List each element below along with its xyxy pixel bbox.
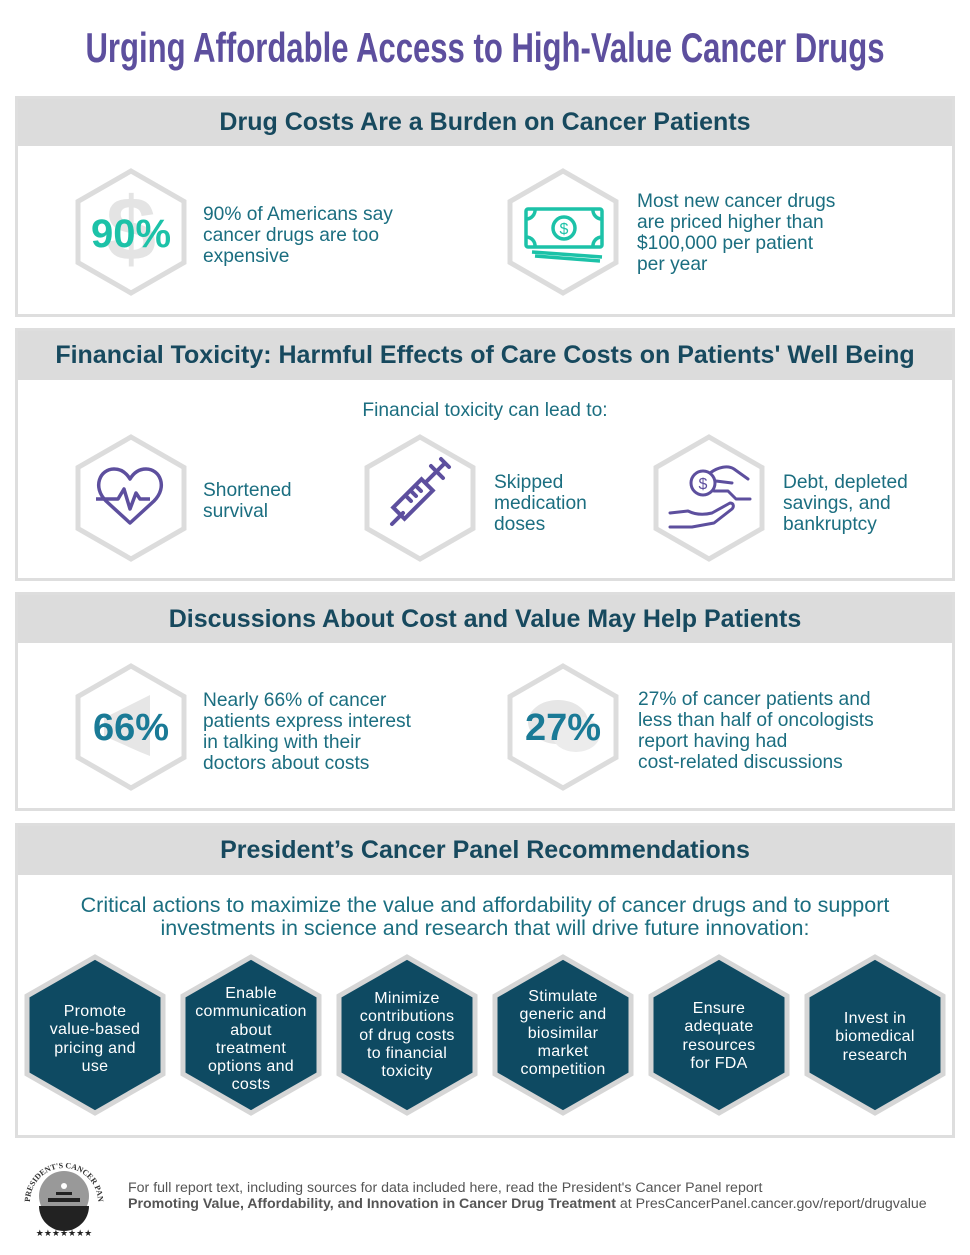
text: nearly 66%: Nearly 66% of cancer (203, 690, 386, 711)
text: shortened survival: survival (203, 501, 268, 522)
text: new cancer drugs: are priced higher than (637, 212, 824, 233)
rec 1: pricing and (54, 1040, 136, 1057)
text: 27%: cost-related discussions (638, 752, 843, 773)
panel: recommendations (15, 823, 955, 1138)
icon: 90% hexagon: 90% (91, 212, 171, 256)
text: shortened survival (203, 480, 292, 522)
heading: recommendations (18, 826, 952, 875)
rec 2: options and (208, 1058, 294, 1075)
rec 2: about (230, 1022, 272, 1039)
rec 3: contributions (360, 1008, 454, 1025)
rec 5: adequate (684, 1018, 754, 1035)
icon: 66% hexagon (76, 663, 186, 791)
rec 5 (683, 1000, 755, 1072)
text: shortened survival: Shortened (203, 480, 292, 501)
rec 4: generic and (520, 1006, 606, 1023)
rec 1: use (82, 1058, 108, 1075)
text: nearly 66% (203, 690, 411, 774)
panel: discussions (15, 592, 955, 811)
text: 27%: report having had (638, 731, 787, 752)
rec 5: resources (683, 1037, 755, 1054)
rec 3: toxicity (381, 1063, 433, 1080)
subtitle (81, 893, 890, 940)
heading: drug costs (18, 99, 952, 146)
rec 1 (50, 1003, 140, 1075)
icon: 90% hexagon: $ (106, 180, 156, 280)
footer text: Promoting Value, Affordability, and Innovation in Cancer Drug Treatment at PresCancerPanel.cancer.gov/report/drugvalue (128, 1196, 927, 1212)
text: new cancer drugs: $100,000 per patient (637, 233, 813, 254)
rec 5: for FDA (690, 1055, 748, 1072)
text: nearly 66%: in talking with their (203, 732, 361, 753)
icon: 27% hexagon (508, 663, 618, 791)
rec 6 (835, 1010, 915, 1064)
panel: drug costs (15, 96, 955, 317)
logo (24, 1162, 104, 1238)
heading: financial toxicity (18, 331, 952, 380)
heading: recommendations: President’s Cancer Panel Recommendations (220, 836, 750, 864)
rec 5: Ensure (693, 1000, 745, 1017)
rec 1: value-based (50, 1021, 140, 1038)
hexagons: recommendations (24, 954, 946, 1116)
icon: 66% hexagon: 66% (93, 707, 169, 749)
text: skipped doses: Skipped (494, 472, 563, 493)
rec 3: Minimize (374, 990, 440, 1007)
text: nearly 66%: doctors about costs (203, 753, 369, 774)
rec 2: costs (232, 1076, 270, 1093)
subtitle: Critical actions to maximize the value and affordability of cancer drugs and to support (81, 893, 889, 917)
rec 2: communication (195, 1003, 307, 1020)
rec 1: Promote (64, 1003, 126, 1020)
text: new cancer drugs (637, 191, 835, 275)
heading: financial toxicity: Financial Toxicity: Harmful Effects of Care Costs on Patients' Well Being (55, 341, 915, 369)
rec 2: Enable (225, 985, 277, 1002)
rec 4: Stimulate (528, 988, 598, 1005)
text: new cancer drugs: per year (637, 254, 707, 275)
logo: ★★★★★★★ (36, 1228, 92, 1238)
text: new cancer drugs: Most new cancer drugs (637, 191, 835, 212)
text: skipped doses: medication (494, 493, 587, 514)
rec 6: research (843, 1047, 907, 1064)
text: nearly 66%: patients express interest (203, 711, 411, 732)
icon: money hexagon (508, 168, 618, 296)
text: 90% of Americans: 90% of Americans say (203, 204, 393, 225)
icon: money hands hexagon: $ (699, 476, 708, 493)
rec 2: treatment (216, 1040, 286, 1057)
heading: discussions (18, 595, 952, 643)
rec 6: Invest in (844, 1010, 906, 1027)
title: Urging Affordable Access to High-Value Cancer Drugs (85, 24, 885, 71)
subtitle: investments in science and research that will drive future innovation: (161, 916, 809, 940)
icon: syringe hexagon (364, 434, 476, 562)
heading: drug costs: Drug Costs Are a Burden on Cancer Patients (219, 108, 751, 136)
icon: 90% hexagon (76, 168, 186, 296)
rec 3: of drug costs (359, 1027, 455, 1044)
text: debt: bankruptcy (783, 514, 877, 535)
icon: heart hexagon (76, 434, 186, 562)
subheading: Financial toxicity can lead to: (362, 400, 608, 421)
text: 27%: 27% of cancer patients and (638, 689, 871, 710)
text: skipped doses: doses (494, 514, 545, 535)
text: 27% (638, 689, 874, 773)
rec 4: biosimilar (528, 1025, 598, 1042)
rec 3: to financial (367, 1045, 447, 1062)
rec 6: biomedical (835, 1028, 915, 1045)
footer text (128, 1180, 927, 1212)
rec 2 (195, 985, 307, 1093)
panel: financial toxicity (15, 328, 955, 581)
text: skipped doses (494, 472, 587, 535)
icon: 27% hexagon: 27% (525, 707, 601, 749)
rec 3 (359, 990, 455, 1080)
rec 4 (520, 988, 606, 1078)
text: debt (783, 472, 908, 535)
text: debt: Debt, depleted (783, 472, 908, 493)
text: 90% of Americans: expensive (203, 246, 289, 267)
text: debt: savings, and (783, 493, 891, 514)
heading: discussions: Discussions About Cost and Value May Help Patients (169, 605, 801, 633)
text: 27%: less than half of oncologists (638, 710, 874, 731)
footer text: For full report text, including sources for data included here, read the President's Cancer Panel report (128, 1180, 762, 1196)
icon: money hands hexagon (654, 434, 764, 562)
icon: money hexagon: $ (560, 221, 569, 238)
text: 90% of Americans (203, 204, 393, 267)
text: 90% of Americans: cancer drugs are too (203, 225, 379, 246)
rec 4: competition (520, 1061, 606, 1078)
rec 4: market (538, 1043, 588, 1060)
